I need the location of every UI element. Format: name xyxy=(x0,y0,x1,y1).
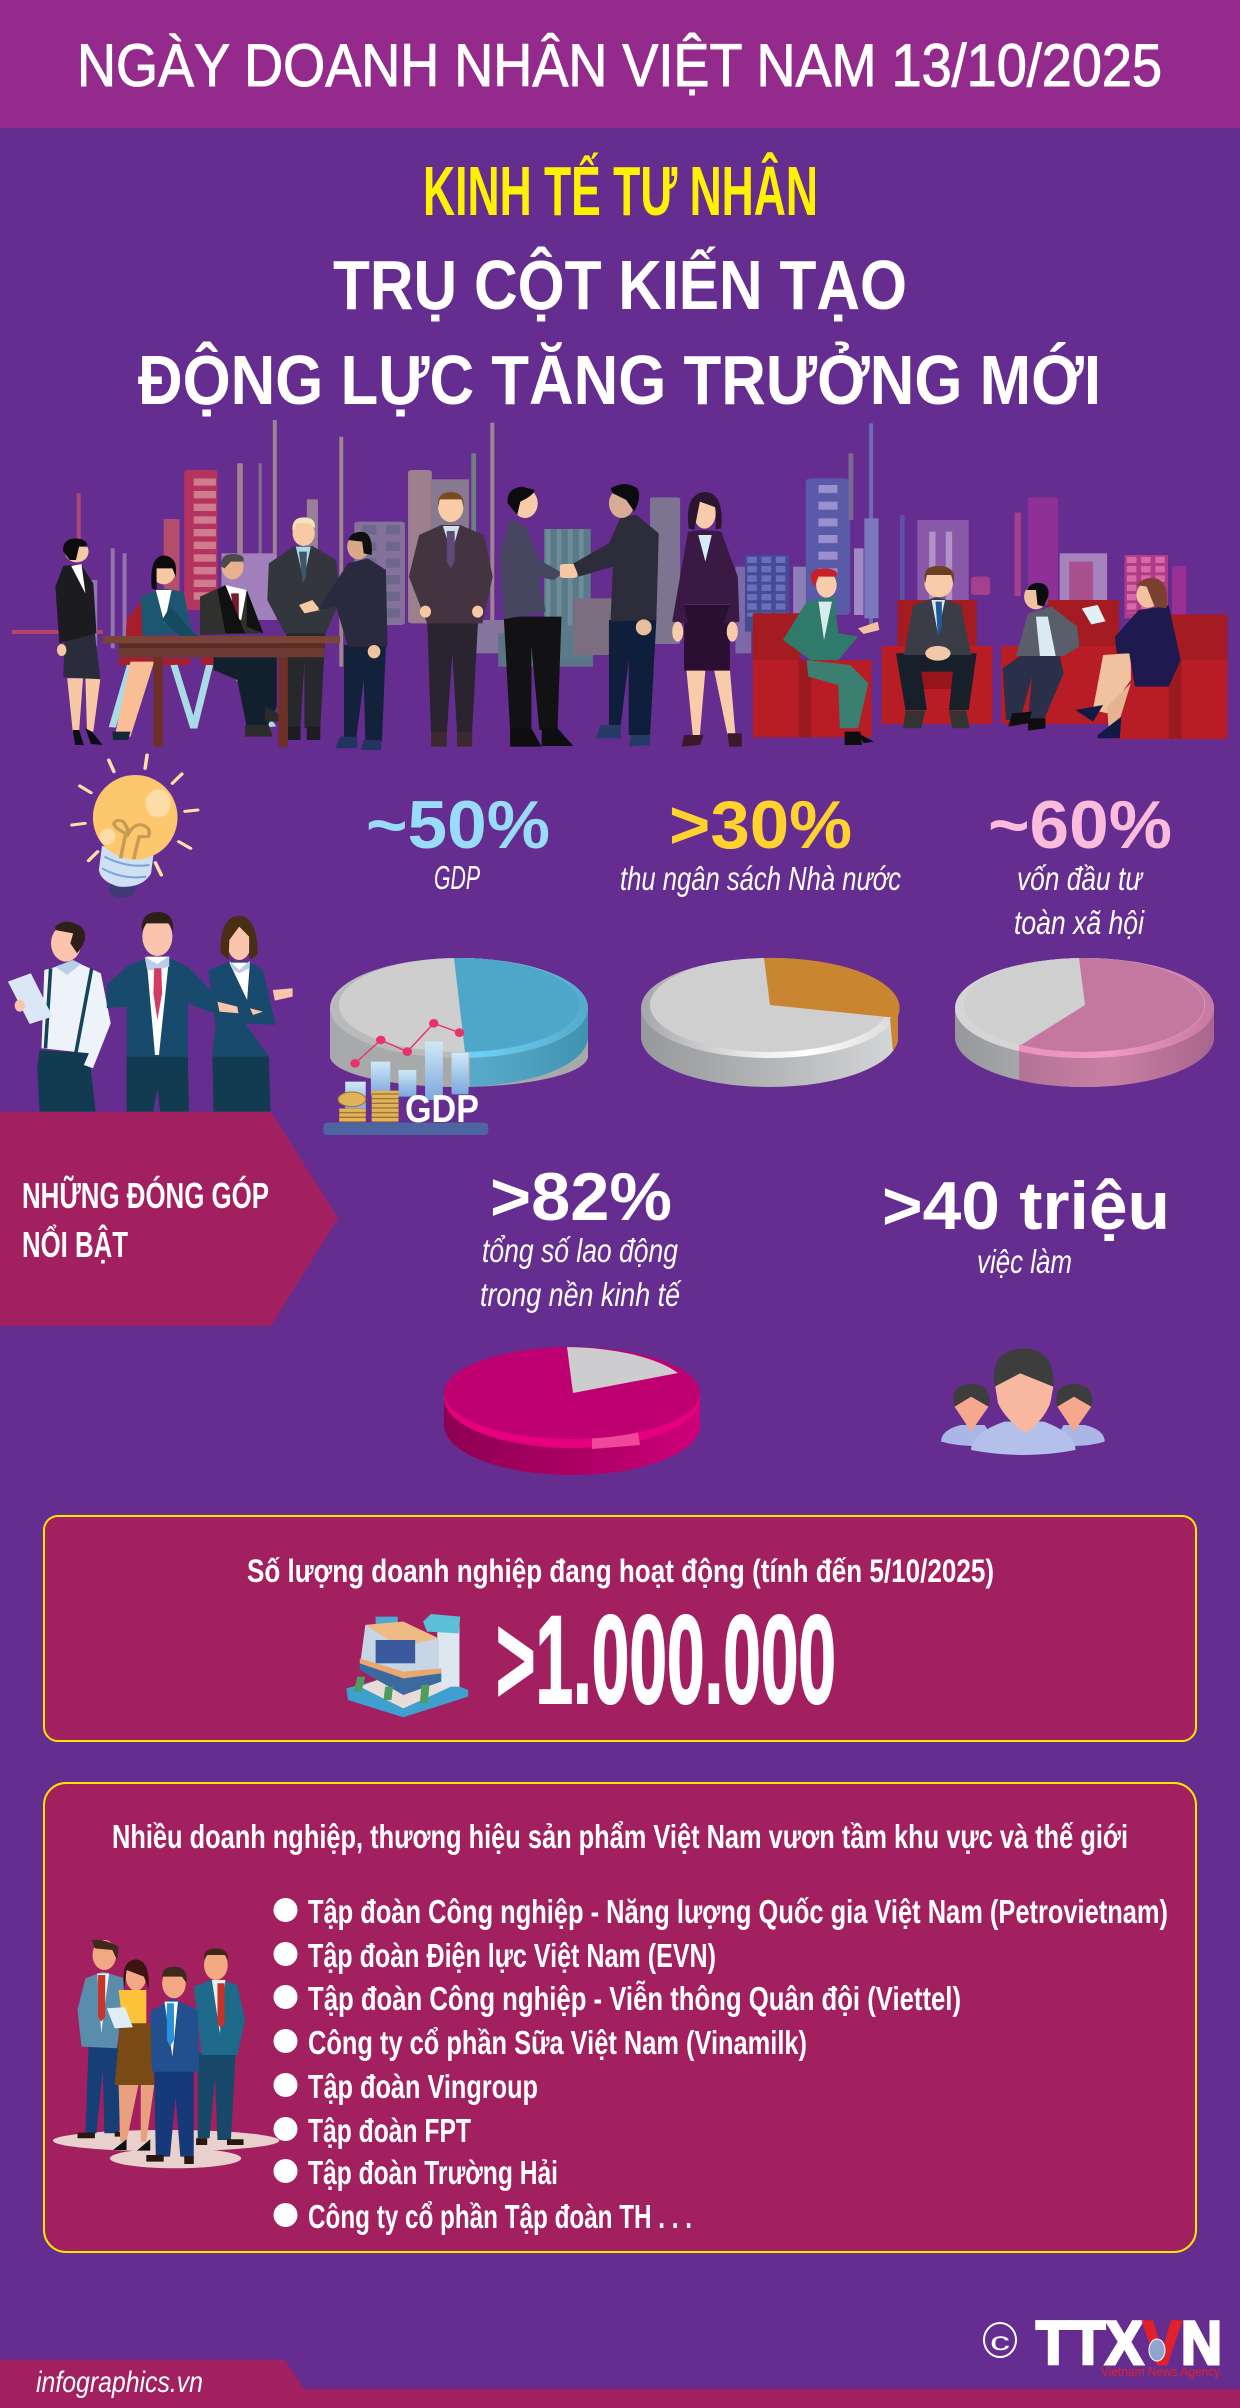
list item: Vingroup: Tập đoàn Vingroup xyxy=(308,2068,538,2105)
caption: GDP xyxy=(434,859,480,896)
person: seated man xyxy=(200,554,278,737)
person: standing woman xyxy=(55,538,103,745)
pie chart: state budget share xyxy=(641,958,900,1087)
person: handshake right xyxy=(573,484,659,747)
caption line one: vốn đầu tư xyxy=(1017,860,1144,897)
person: seated woman xyxy=(112,555,198,740)
list item: Vingroup xyxy=(274,2068,538,2105)
value: >82% xyxy=(490,1159,672,1235)
red sofas xyxy=(753,600,1227,739)
title line: growth driver: ĐỘNG LỰC TĂNG TRƯỞNG MỚI xyxy=(138,340,1101,419)
banner text line two: NỔI BẬT xyxy=(22,1222,128,1265)
panel: number of active enterprises xyxy=(44,1516,1196,1741)
value: >30% xyxy=(669,787,852,863)
caption line two: toàn xã hội xyxy=(1014,904,1145,941)
footer strip and source tab xyxy=(0,2360,1240,2408)
illustration: lightbulb and team of three xyxy=(8,755,293,1112)
source website: infographics.vn xyxy=(36,2366,203,2399)
value: ~60% xyxy=(988,787,1172,863)
banner: outstanding contributions xyxy=(0,1112,338,1326)
person: man with tablet xyxy=(8,922,111,1112)
agency wordmark: TTXVN xyxy=(1036,2309,1222,2377)
statistic: >82% labour force xyxy=(480,1159,682,1313)
list item: FPT xyxy=(274,2112,471,2149)
icon: GDP bars and coins: GDP xyxy=(405,1088,479,1131)
person: white-haired man xyxy=(267,517,340,740)
seated group: chairs xyxy=(112,602,273,728)
caption line one: tổng số lao động xyxy=(482,1232,679,1269)
globe xyxy=(1149,2339,1165,2361)
city skyline xyxy=(12,420,1186,667)
list item: Viettel: Tập đoàn Công nghiệp - Viễn thông Quân đội (Viettel) xyxy=(308,1980,961,2017)
person: handshake left xyxy=(500,487,577,747)
title line: private economy: KINH TẾ TƯ NHÂN xyxy=(423,151,818,230)
value: >40 triệu xyxy=(882,1168,1170,1244)
title line: pillar: TRỤ CỘT KIẾN TẠO xyxy=(333,245,907,324)
statistic: >30% state budget xyxy=(620,787,901,897)
panel heading: Số lượng doanh nghiệp đang hoạt động (tính đến 5/10/2025) xyxy=(247,1553,994,1589)
logo: TTXVN Vietnam News Agency xyxy=(984,2309,1222,2379)
icon: group of three people xyxy=(941,1348,1105,1455)
copyright symbol: c xyxy=(990,2326,1010,2356)
list item: TH Group: Công ty cổ phần Tập đoàn TH . . . xyxy=(308,2198,692,2235)
panel: Vietnamese enterprises reaching the world xyxy=(44,1783,1196,2252)
list item: Truong Hai xyxy=(274,2154,558,2191)
person: man in brown suit xyxy=(409,492,493,747)
pie chart: labour share xyxy=(444,1347,700,1475)
pie chart: investment share xyxy=(955,958,1214,1087)
value: ~50% xyxy=(366,787,550,863)
person: woman in purple suit xyxy=(672,492,742,747)
header band xyxy=(0,0,1240,128)
person: man on sofa xyxy=(896,566,977,728)
person: woman with document on sofa xyxy=(1075,578,1181,738)
person: woman with crossed arms xyxy=(208,916,293,1112)
list item: Truong Hai: Tập đoàn Trường Hải xyxy=(308,2154,558,2191)
caption: việc làm xyxy=(977,1243,1072,1280)
list item: EVN: Tập đoàn Điện lực Việt Nam (EVN) xyxy=(308,1937,716,1974)
caption: thu ngân sách Nhà nước xyxy=(620,860,901,897)
person: man reading on sofa xyxy=(1003,583,1079,731)
banner text line one: NHỮNG ĐÓNG GÓP xyxy=(22,1174,269,1216)
person: man shaking hand of elder xyxy=(318,532,387,750)
person: man in centre with red tie xyxy=(107,912,214,1112)
caption line two: trong nền kinh tế xyxy=(480,1276,682,1313)
list item: TH Group xyxy=(274,2198,692,2235)
main title block xyxy=(138,151,1101,419)
table xyxy=(103,636,340,747)
list: enterprises xyxy=(274,1893,1168,2235)
illustration: group of four business people xyxy=(53,1940,279,2168)
illustration: business people in front of city skyline xyxy=(12,420,1227,750)
value: >1.000.000 xyxy=(496,1591,836,1730)
icon: GDP bars and coins xyxy=(323,1019,488,1135)
copyright symbol xyxy=(984,2323,1016,2357)
list item: Vinamilk: Công ty cổ phần Sữa Việt Nam (Vinamilk) xyxy=(308,2024,807,2061)
icon: office building xyxy=(346,1614,468,1717)
icon: lightbulb xyxy=(72,755,198,898)
person: red-haired woman on sofa xyxy=(783,568,879,745)
list item: FPT: Tập đoàn FPT xyxy=(308,2112,471,2149)
pie chart: GDP share xyxy=(330,958,588,1087)
statistic: ~60% investment capital xyxy=(988,787,1172,941)
statistic: ~50% GDP xyxy=(366,787,550,896)
statistic: >40 million jobs xyxy=(882,1168,1170,1280)
agency tagline: Vietnam News Agency xyxy=(1101,2364,1220,2379)
